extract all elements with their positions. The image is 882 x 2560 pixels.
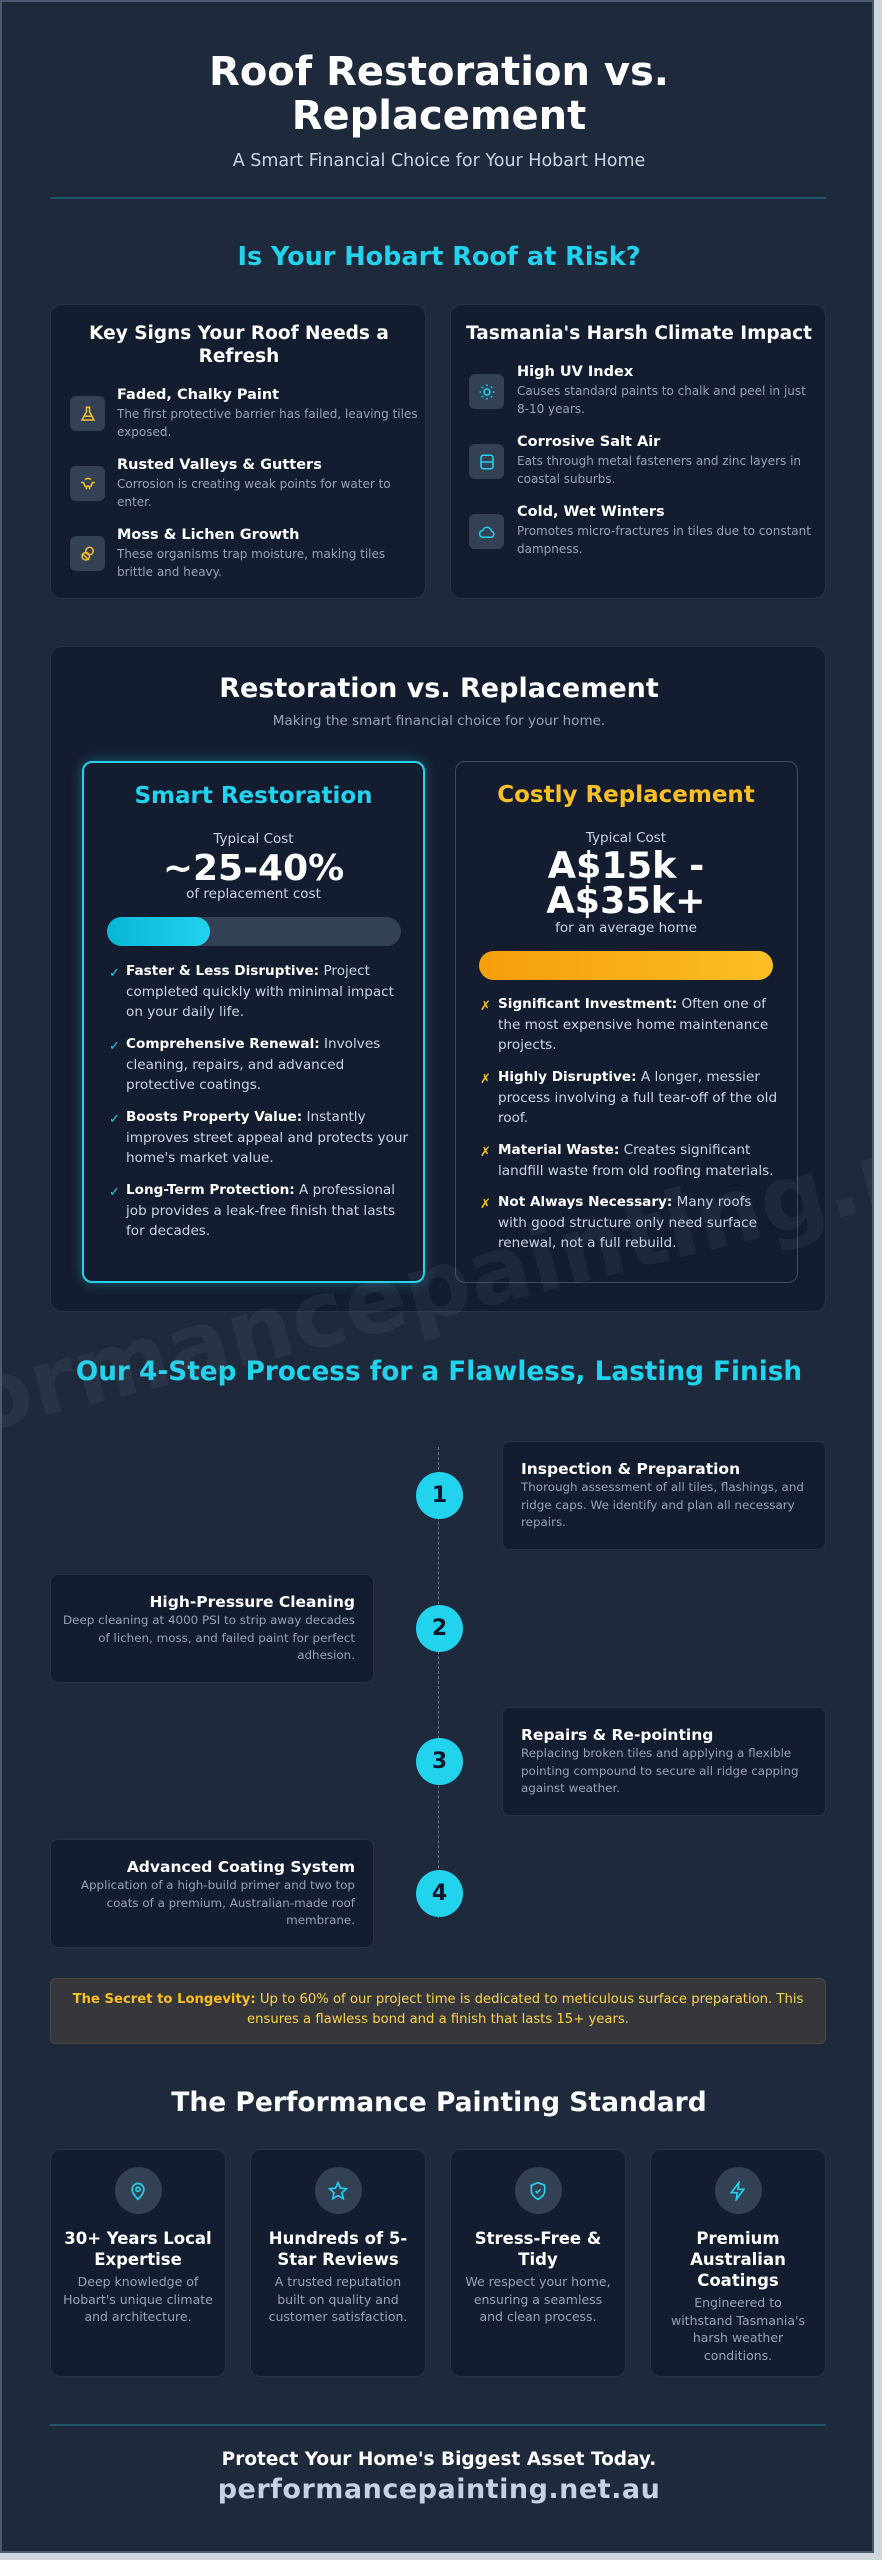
- card: costly replacement: Costly Replacement: [497, 782, 755, 808]
- card: 30+ years: Deep knowledge of Hobart's unique climate and architecture.: [63, 2274, 213, 2324]
- footer website: performancepainting.net.au: [218, 2474, 660, 2505]
- card: reviews: A trusted reputation built on quality and customer satisfaction.: [269, 2274, 407, 2324]
- panel: key signs: [50, 304, 426, 599]
- panel: key signs: Moss & Lichen Growth: [117, 527, 299, 543]
- big number: [546, 844, 706, 922]
- drawback list: Material Waste: Creates significant landfill waste from old roofing materials.: [498, 1142, 774, 1179]
- step 4 number: 4: [432, 1881, 447, 1906]
- step 3 number: 3: [432, 1749, 447, 1774]
- panel: key signs: Rusted Valleys & Gutters: [117, 457, 322, 473]
- title: [209, 49, 669, 139]
- card: costly replacement: [455, 761, 798, 1283]
- step 1: [502, 1441, 826, 1550]
- icon: moss: [70, 536, 105, 571]
- benefit list: ✓: [109, 966, 120, 981]
- heading: at risk: Is Your Hobart Roof at Risk?: [238, 242, 640, 272]
- drawback list: Not Always Necessary: Many roofs with good structure only need surface renewal, not a full rebuild.: [498, 1194, 757, 1251]
- card: reviews: [250, 2149, 426, 2377]
- benefit list: Comprehensive Renewal: Involves cleaning, repairs, and advanced protective coatings.: [126, 1036, 380, 1093]
- step 2 number: [416, 1605, 463, 1652]
- drawback list: Highly Disruptive: A longer, messier process involving a full tear-off of the old roof.: [498, 1069, 777, 1126]
- panel: climate: High UV Index: [517, 364, 633, 380]
- panel: key signs: These organisms trap moisture, making tiles brittle and heavy.: [117, 547, 385, 578]
- step 4: [50, 1839, 374, 1948]
- card: coatings: [650, 2149, 826, 2377]
- subtitle: A Smart Financial Choice for Your Hobart Home: [233, 151, 645, 171]
- card: smart restoration: of replacement cost: [186, 886, 321, 902]
- panel: climate: Cold, Wet Winters: [517, 504, 665, 520]
- card: reviews: Hundreds of 5-Star Reviews: [269, 2229, 407, 2269]
- big number: A$35k+: [546, 879, 706, 922]
- step 1 number: 1: [432, 1483, 447, 1508]
- drawback list: Significant Investment: Often one of the most expensive home maintenance projects.: [498, 996, 768, 1053]
- bar: restoration cost: [107, 917, 401, 946]
- benefit list: Faster & Less Disruptive: Project completed quickly with minimal impact on your daily life.: [126, 963, 394, 1020]
- drawback list: ✗: [480, 1145, 491, 1160]
- benefit list: Boosts Property Value: Instantly improves street appeal and protects your home's market value.: [126, 1109, 408, 1166]
- step 2: High-Pressure Cleaning: [149, 1593, 355, 1611]
- benefit list: ✓: [109, 1039, 120, 1054]
- panel: climate: [450, 304, 826, 599]
- panel: key signs: Faded, Chalky Paint: [117, 387, 279, 403]
- panel: climate: Corrosive Salt Air: [517, 434, 660, 450]
- footer tagline: Protect Your Home's Biggest Asset Today.: [222, 2449, 656, 2470]
- panel: climate: Causes standard paints to chalk and peel in just 8-10 years.: [517, 384, 806, 416]
- step 3: Repairs & Re-pointing: [521, 1726, 713, 1744]
- drawback list: [480, 996, 777, 1251]
- card: coatings: Premium Australian Coatings: [690, 2229, 786, 2290]
- step 2 number: 2: [432, 1616, 447, 1641]
- heading: standard: The Performance Painting Standard: [171, 2087, 707, 2118]
- benefit list: [109, 963, 408, 1239]
- comparison subheading: Making the smart financial choice for your home.: [273, 713, 605, 729]
- panel: key signs: The first protective barrier has failed, leaving tiles exposed.: [117, 407, 418, 438]
- big number: A$15k -: [548, 844, 704, 887]
- card: smart restoration: Typical Cost: [213, 831, 294, 847]
- panel heading: Tasmania's Harsh Climate Impact: [466, 323, 812, 344]
- card: stress-free: [450, 2149, 626, 2377]
- card: costly replacement: Typical Cost: [586, 830, 666, 846]
- icon: sun: [469, 374, 504, 409]
- step 2: [50, 1574, 374, 1683]
- panel: comparison: [50, 646, 826, 1312]
- title: Replacement: [292, 93, 586, 139]
- card: costly replacement: for an average home: [555, 920, 697, 936]
- card: coatings: Engineered to withstand Tasmania's harsh weather conditions.: [671, 2295, 805, 2362]
- callout: secret to longevity: The Secret to Longevity: Up to 60% of our project time is dedicated to meticulous surface preparation. This ensures a flawless bond and a finish that lasts 15+ years.: [73, 1992, 803, 2027]
- title: Roof Restoration vs.: [209, 49, 669, 95]
- card: smart restoration: [82, 761, 425, 1283]
- step 3 number: [416, 1738, 463, 1785]
- step 4: Advanced Coating System: [127, 1858, 355, 1876]
- card: 30+ years: [50, 2149, 226, 2377]
- step 2: Deep cleaning at 4000 PSI to strip away decades of lichen, moss, and failed paint for perfect adhesion.: [63, 1613, 355, 1662]
- timeline line: [438, 1447, 439, 1918]
- panel: key signs: Corrosion is creating weak points for water to enter.: [117, 477, 391, 508]
- drawback list: ✗: [480, 1072, 491, 1087]
- step 1 number: [416, 1472, 463, 1519]
- benefit list: ✓: [109, 1185, 120, 1200]
- big number: ~25-40%: [163, 848, 344, 889]
- card: stress-free: Stress-Free & Tidy: [475, 2229, 601, 2269]
- heading: process: Our 4-Step Process for a Flawless, Lasting Finish: [76, 1357, 802, 1387]
- benefit list: ✓: [109, 1112, 120, 1127]
- callout: secret to longevity: [50, 1978, 826, 2044]
- step 4: Application of a high-build primer and two top coats of a premium, Australian-made roof membrane.: [81, 1878, 355, 1927]
- panel: climate: Eats through metal fasteners and zinc layers in coastal suburbs.: [517, 454, 801, 486]
- panel: climate: Promotes micro-fractures in tiles due to constant dampness.: [517, 524, 811, 556]
- card: stress-free: We respect your home, ensuring a seamless and clean process.: [465, 2274, 611, 2324]
- icon: cloud: [469, 514, 504, 549]
- step 1: Inspection & Preparation: [521, 1460, 740, 1478]
- step 3: [502, 1707, 826, 1816]
- card: smart restoration: Smart Restoration: [134, 783, 373, 809]
- step 3: Replacing broken tiles and applying a flexible pointing compound to secure all ridge capping against weather.: [521, 1746, 798, 1795]
- bar: replacement cost: [479, 951, 773, 980]
- step 1: Thorough assessment of all tiles, flashings, and ridge caps. We identify and plan all necessary repairs.: [521, 1480, 804, 1529]
- icon: flask: [70, 396, 105, 431]
- icon: salt: [469, 444, 504, 479]
- comparison heading: Restoration vs. Replacement: [219, 673, 659, 704]
- icon: gutter: [70, 466, 105, 501]
- step 4 number: [416, 1870, 463, 1917]
- panel heading: Key Signs Your Roof Needs a Refresh: [89, 323, 389, 367]
- drawback list: ✗: [480, 999, 491, 1014]
- card: 30+ years: 30+ Years Local Expertise: [64, 2229, 212, 2269]
- benefit list: Long-Term Protection: A professional job provides a leak-free finish that lasts for decades.: [126, 1182, 395, 1239]
- drawback list: ✗: [480, 1197, 491, 1212]
